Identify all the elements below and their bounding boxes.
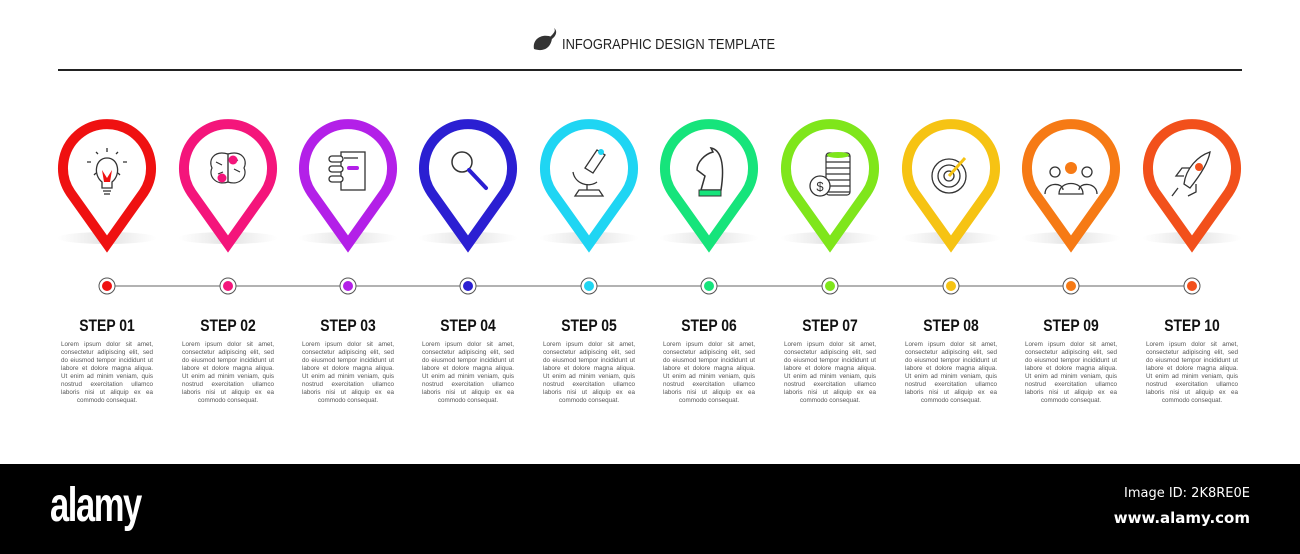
- pin 9: [1021, 124, 1121, 294]
- header logo: [534, 28, 556, 50]
- pin 8: [901, 124, 1001, 294]
- text: STEP 04: [440, 316, 496, 335]
- text: STEP 05: [561, 316, 617, 335]
- text: Lorem ipsum dolor sit amet, consectetur adipiscing elit, sed do eiusmod tempor incididunt ut labore et dolore magna aliqua. Ut enim ad minim veniam, quis nostrud exercitation ullamco laboris nisi ut aliquip ex ea commodo consequat.: [784, 341, 876, 404]
- pin 3: [298, 124, 398, 294]
- pin 1: [57, 124, 157, 294]
- footer bar: [0, 464, 1300, 554]
- text: Lorem ipsum dolor sit amet, consectetur adipiscing elit, sed do eiusmod tempor incididunt ut labore et dolore magna aliqua. Ut enim ad minim veniam, quis nostrud exercitation ullamco laboris nisi ut aliquip ex ea commodo consequat.: [422, 341, 514, 404]
- title: INFOGRAPHIC DESIGN TEMPLATE: [562, 36, 775, 53]
- text: STEP 07: [802, 316, 858, 335]
- pin 7: [780, 124, 880, 294]
- text: STEP 08: [923, 316, 979, 335]
- text: Lorem ipsum dolor sit amet, consectetur adipiscing elit, sed do eiusmod tempor incididunt ut labore et dolore magna aliqua. Ut enim ad minim veniam, quis nostrud exercitation ullamco laboris nisi ut aliquip ex ea commodo consequat.: [905, 341, 997, 404]
- step texts: Lorem ipsum dolor sit amet, consectetur adipiscing elit, sed do eiusmod tempor incididunt ut labore et dolore magna aliqua. Ut enim ad minim veniam, quis nostrud exercitation ullamco laboris nisi ut aliquip ex ea commodo consequat.: [61, 341, 153, 404]
- image id: Image ID: 2K8RE0E: [1124, 486, 1250, 501]
- alamy logo: alamy: [50, 479, 141, 532]
- pin 2: [178, 124, 278, 294]
- pin 7: $: [816, 179, 824, 194]
- step headings: STEP 01: [79, 316, 135, 335]
- text: Lorem ipsum dolor sit amet, consectetur adipiscing elit, sed do eiusmod tempor incididunt ut labore et dolore magna aliqua. Ut enim ad minim veniam, quis nostrud exercitation ullamco laboris nisi ut aliquip ex ea commodo consequat.: [543, 341, 635, 404]
- text: STEP 10: [1164, 316, 1220, 335]
- pin 5: [539, 124, 639, 294]
- text: STEP 06: [681, 316, 737, 335]
- text: Lorem ipsum dolor sit amet, consectetur adipiscing elit, sed do eiusmod tempor incididunt ut labore et dolore magna aliqua. Ut enim ad minim veniam, quis nostrud exercitation ullamco laboris nisi ut aliquip ex ea commodo consequat.: [1025, 341, 1117, 404]
- pin 10: [1142, 124, 1242, 294]
- text: Lorem ipsum dolor sit amet, consectetur adipiscing elit, sed do eiusmod tempor incididunt ut labore et dolore magna aliqua. Ut enim ad minim veniam, quis nostrud exercitation ullamco laboris nisi ut aliquip ex ea commodo consequat.: [302, 341, 394, 404]
- text: STEP 09: [1043, 316, 1099, 335]
- text: STEP 02: [200, 316, 256, 335]
- pin 4: [418, 124, 518, 294]
- text: Lorem ipsum dolor sit amet, consectetur adipiscing elit, sed do eiusmod tempor incididunt ut labore et dolore magna aliqua. Ut enim ad minim veniam, quis nostrud exercitation ullamco laboris nisi ut aliquip ex ea commodo consequat.: [182, 341, 274, 404]
- text: Lorem ipsum dolor sit amet, consectetur adipiscing elit, sed do eiusmod tempor incididunt ut labore et dolore magna aliqua. Ut enim ad minim veniam, quis nostrud exercitation ullamco laboris nisi ut aliquip ex ea commodo consequat.: [663, 341, 755, 404]
- text: Lorem ipsum dolor sit amet, consectetur adipiscing elit, sed do eiusmod tempor incididunt ut labore et dolore magna aliqua. Ut enim ad minim veniam, quis nostrud exercitation ullamco laboris nisi ut aliquip ex ea commodo consequat.: [1146, 341, 1238, 404]
- url: www.alamy.com: [1114, 509, 1250, 527]
- pin 6: [659, 124, 759, 294]
- text: STEP 03: [320, 316, 376, 335]
